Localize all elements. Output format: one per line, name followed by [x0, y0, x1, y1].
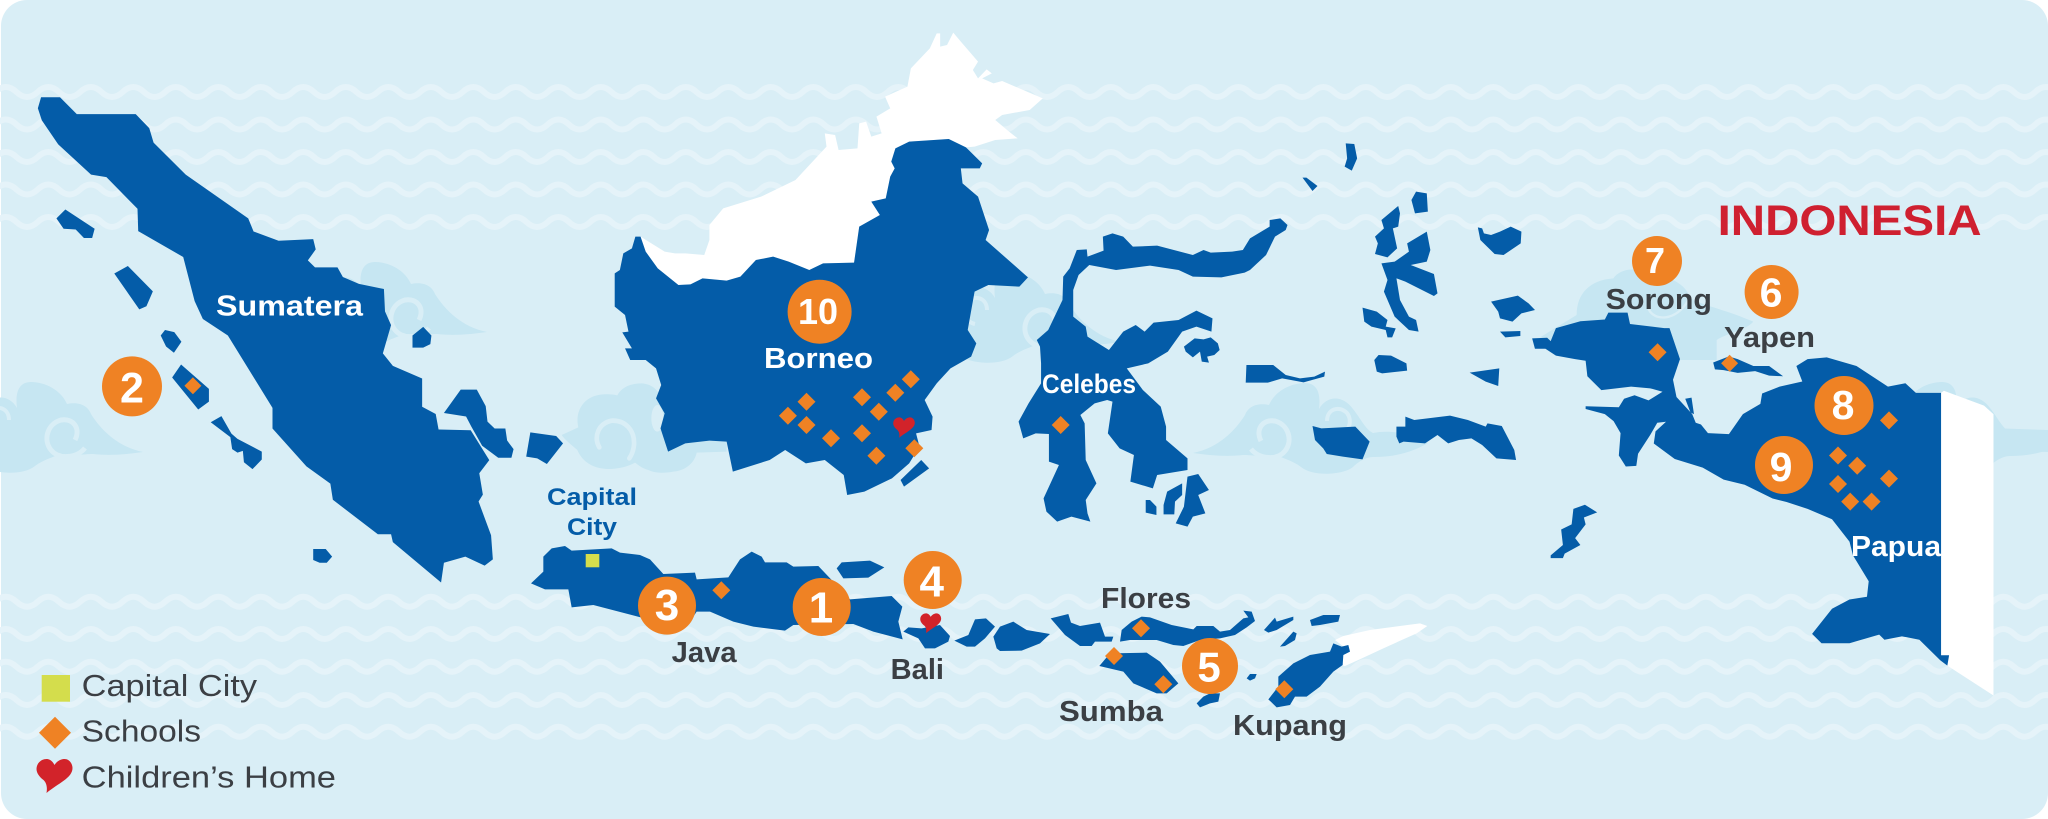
legend item: Schools	[39, 714, 201, 749]
island: Flores	[1120, 611, 1255, 646]
label: Papua: Papua	[1851, 531, 1942, 563]
neighbouring land: Papua New Guinea (white)	[1941, 391, 1993, 696]
numbered badge 6	[1745, 265, 1799, 319]
wave pattern: upper bands	[0, 87, 2048, 227]
island: Sumba	[1099, 653, 1178, 693]
numbered badge 5	[1182, 638, 1238, 694]
island: Timor	[1268, 643, 1350, 707]
label: Capital City on map: Capital	[547, 484, 637, 511]
numbered badge 9	[1755, 436, 1813, 494]
label: Sorong: Sorong	[1606, 284, 1712, 316]
islands: Maluku	[1246, 143, 1535, 460]
islands: Riau, Bangka and Enggano	[313, 327, 514, 563]
numbered badge 2	[102, 356, 162, 416]
islands: around Celebes	[1146, 337, 1220, 527]
neighbouring land: Malaysia (white)	[641, 33, 1043, 285]
numbered badge 7	[1632, 236, 1682, 286]
school markers	[184, 343, 1898, 698]
region: Celebes and Maluku	[1019, 143, 1535, 527]
numbered badge 1	[793, 578, 851, 636]
icon: children's home, Bali	[920, 613, 941, 633]
islands: Alor chain	[1197, 615, 1340, 707]
label: Sumba: Sumba	[1059, 696, 1164, 728]
numbered badge 10: 10	[798, 291, 838, 332]
title: INDONESIA	[1718, 197, 1982, 245]
island: Papua	[1532, 313, 1949, 666]
region: Borneo	[526, 139, 1028, 495]
island: Java	[531, 546, 903, 639]
decorative clouds	[0, 262, 2048, 474]
icon: capital city square	[586, 554, 599, 567]
label: Flores: Flores	[1101, 583, 1191, 615]
label: Kupang: Kupang	[1233, 710, 1347, 742]
legend	[36, 668, 336, 794]
island: Celebes	[1019, 218, 1287, 522]
numbered badge 3: 3	[655, 581, 679, 630]
numbered badge 10	[788, 280, 852, 344]
islands: Yapen, Cenderawasih and Aru	[1551, 356, 1783, 558]
label: Capital City on map: City	[567, 514, 618, 541]
wave pattern: lower bands	[0, 597, 2048, 737]
island: Sumatera	[38, 97, 493, 582]
numbered badge 9: 9	[1770, 444, 1792, 490]
label: Bali: Bali	[891, 654, 944, 686]
legend item: Schools: Schools	[82, 714, 201, 749]
islands: western Sumatra chain	[56, 209, 262, 469]
legend item: Children's Home: Children’s Home	[82, 759, 336, 794]
label: Borneo: Borneo	[764, 343, 873, 375]
label: Celebes: Celebes	[1042, 369, 1136, 399]
islands: Bali, Madura and Lombok	[837, 561, 995, 648]
legend item: Capital City: Capital City	[82, 668, 258, 703]
icon: children's home, Borneo	[893, 417, 915, 438]
region: Papua	[1532, 313, 1949, 666]
numbered badge 8	[1814, 376, 1874, 435]
region: Lesser Sunda islands	[993, 611, 1350, 707]
label: Java: Java	[672, 637, 738, 669]
island: Sumbawa	[993, 614, 1113, 651]
region: Sumatra islands	[38, 97, 514, 582]
numbered badge 3	[638, 577, 696, 635]
islands: Laut and Belitung	[526, 432, 929, 487]
island: Kalimantan	[615, 139, 1028, 495]
label: Sumatera: Sumatera	[216, 290, 364, 322]
numbered badge 7: 7	[1645, 240, 1665, 281]
numbered badge 4: 4	[919, 558, 944, 607]
numbered badge 1: 1	[809, 584, 833, 633]
numbered badge 8: 8	[1832, 382, 1854, 428]
region: Java and Bali	[531, 546, 995, 648]
numbered badge 5: 5	[1197, 644, 1221, 691]
neighbouring land: East Timor (white)	[1335, 623, 1427, 666]
numbered badge 4	[904, 551, 962, 609]
label: Yapen: Yapen	[1724, 322, 1815, 354]
numbered badge 6: 6	[1760, 270, 1782, 316]
numbered badge 2: 2	[120, 365, 144, 413]
